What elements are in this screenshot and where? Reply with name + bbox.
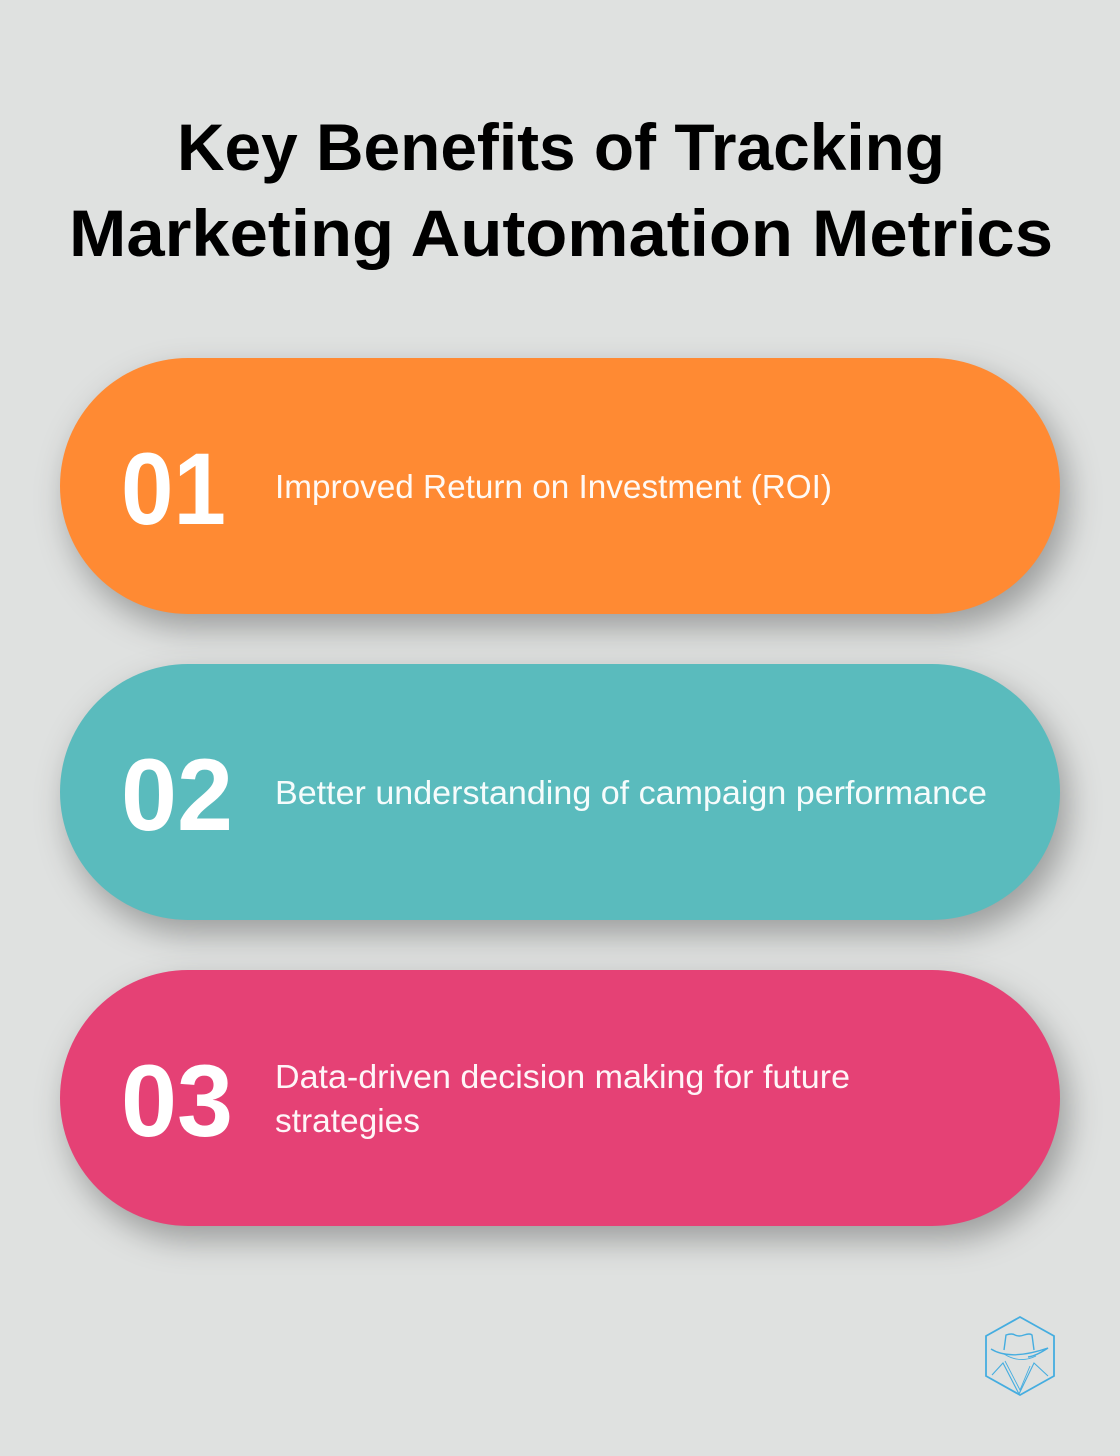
text: benefit 02: Better understanding of campaign performance: [275, 774, 987, 811]
text: benefit 01: Improved Return on Investment (ROI): [275, 468, 832, 505]
title: Marketing Automation Metrics: [69, 196, 1053, 270]
number 02: 02: [121, 738, 233, 852]
title: [69, 110, 1053, 270]
title: Key Benefits of Tracking: [177, 110, 945, 184]
text: benefit 03: [275, 1058, 850, 1139]
text: benefit 03: Data-driven decision making for future: [275, 1058, 850, 1095]
panel: benefit 03: [60, 970, 1068, 1240]
icon: logo hexagon with hat: [986, 1317, 1054, 1395]
number 03: 03: [121, 1044, 233, 1158]
text: benefit 03: strategies: [275, 1102, 420, 1139]
panel: benefit 01: [60, 358, 1068, 628]
panel: benefit 02: [60, 664, 1068, 934]
number 01: 01: [121, 432, 226, 546]
